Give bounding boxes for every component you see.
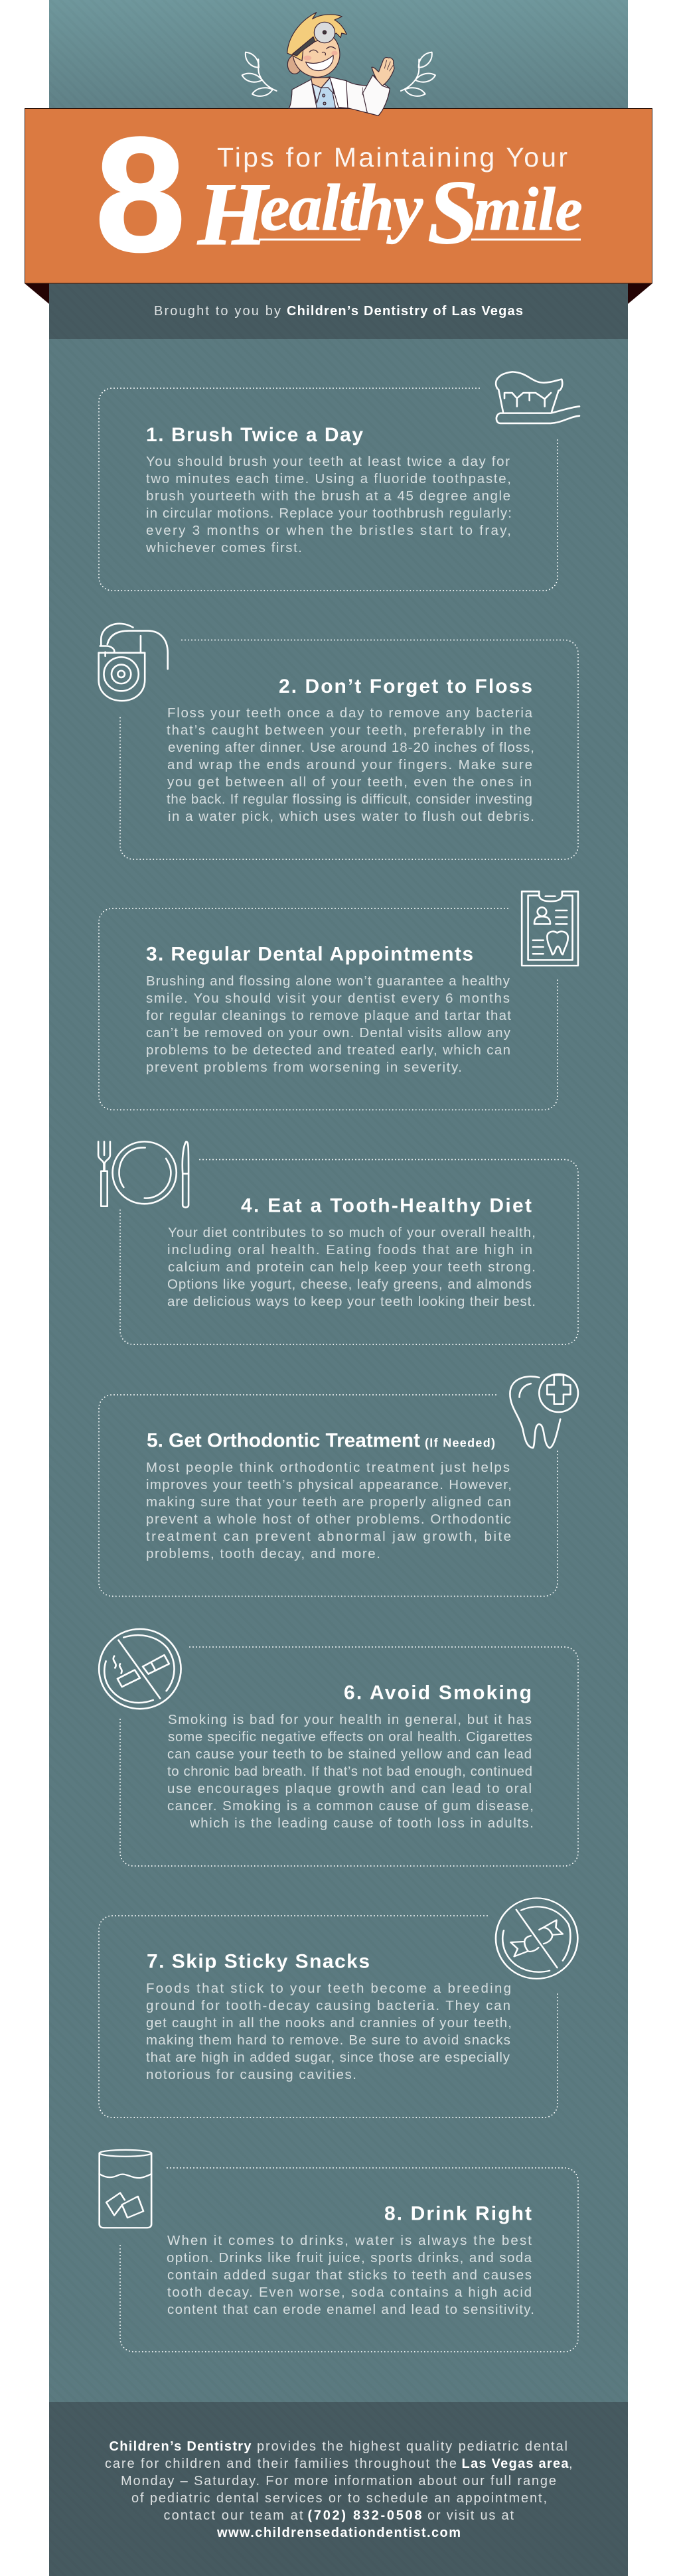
dark subtitle strip	[49, 283, 628, 339]
orange title banner	[25, 109, 652, 283]
tip 1 heading: 1. Brush Twice a Day	[146, 424, 363, 446]
title: number 8: 8	[95, 104, 186, 286]
tip 5 body text	[146, 1460, 512, 1561]
footer panel	[49, 2402, 628, 2576]
footer text: provides the highest quality pediatric dental	[257, 2439, 567, 2454]
footer text: of pediatric dental services or to schedule an appointment,	[131, 2491, 547, 2506]
icon: no candy	[496, 1898, 577, 1979]
panel: tip 3	[99, 891, 578, 1109]
tip 2 body text	[167, 705, 534, 824]
tip 6 body text: cancer. Smoking is a common cause of gum disease,	[167, 1798, 534, 1814]
title: healthy smile: mile	[474, 175, 583, 243]
tip 4 body text	[167, 1225, 536, 1309]
tip 6 body text: use encourages plaque growth and can lead to oral	[167, 1781, 532, 1796]
tip 1 body text: whichever comes first.	[145, 540, 302, 555]
tip 3 body text: problems to be detected and treated early, which can	[146, 1042, 510, 1058]
tip 7 body text: ground for tooth-decay causing bacteria. They can	[146, 1998, 510, 2013]
tip 1 body text	[145, 454, 512, 555]
panel: tip 2	[99, 624, 578, 859]
subtitle: brought to you by: Brought to you by	[154, 304, 281, 319]
tip 2 body text: the back. If regular flossing is difficult, consider investing	[167, 792, 532, 807]
tip 1 body text: You should brush your teeth at least twice a day for	[146, 454, 510, 469]
tip 8 body text	[167, 2233, 534, 2317]
tip 6 body text: some specific negative effects on oral health. Cigarettes	[168, 1729, 532, 1745]
tip 2 body text: you get between all of your teeth, even the ones in	[167, 774, 532, 790]
icon: plate and cutlery	[98, 1141, 188, 1208]
tip 3 body text: Brushing and flossing alone won’t guarantee a healthy	[146, 973, 510, 989]
subtitle: sponsor name: Children’s Dentistry of Las Vegas	[287, 304, 523, 319]
title: healthy smile	[197, 161, 583, 264]
tip 5 heading: 5. Get Orthodontic Treatment	[147, 1429, 420, 1452]
tip 1 body text: in circular motions. Replace your toothbrush regularly:	[146, 506, 512, 521]
tip 5 body text: Most people think orthodontic treatment just helps	[146, 1460, 510, 1475]
tip 6 body text	[167, 1712, 534, 1831]
tip 4 body text: are delicious ways to keep your teeth looking their best.	[167, 1294, 536, 1309]
footer text	[105, 2439, 573, 2540]
footer text: contact our team at	[163, 2508, 303, 2523]
panel: tip 4	[98, 1141, 578, 1344]
tip 3 body text	[146, 973, 511, 1075]
tip 8 body text: When it comes to drinks, water is always the best	[167, 2233, 532, 2248]
tip 7 body text: notorious for causing cavities.	[146, 2067, 356, 2082]
tip 3 heading: 3. Regular Dental Appointments	[146, 944, 473, 965]
panel: tip 8	[100, 2150, 578, 2352]
tip 7 body text: making them hard to remove. Be sure to avoid snacks	[146, 2033, 510, 2048]
title: tips for maintaining your: Tips for Maintaining Your	[217, 142, 567, 173]
tip 8 heading: 8. Drink Right	[384, 2203, 532, 2224]
tip 8 body text: contain added sugar that sticks to teeth and causes	[167, 2267, 532, 2283]
tip 5 heading: (If Needed)	[425, 1436, 495, 1449]
tip 7 body text: that are high in added sugar, since those are especially	[146, 2050, 510, 2065]
tip 5 body text: making sure that your teeth are properly aligned can	[146, 1494, 511, 1510]
tip 2 body text: in a water pick, which uses water to flush out debris.	[168, 809, 534, 824]
tip 4 body text: Your diet contributes to so much of your overall health,	[168, 1225, 536, 1240]
tip 7 heading: 7. Skip Sticky Snacks	[147, 1951, 370, 1972]
tip 5 body text: problems, tooth decay, and more.	[146, 1546, 380, 1561]
panel: tip 6	[99, 1629, 578, 1866]
tip 2 body text: evening after dinner. Use around 18-20 inches of floss,	[168, 740, 534, 755]
icon: no smoking	[99, 1629, 181, 1709]
icon: dental clipboard	[522, 891, 578, 966]
footer text: Children’s Dentistry	[109, 2439, 252, 2454]
tip 6 body text: Smoking is bad for your health in general, but it has	[168, 1712, 532, 1727]
footer text: ,	[569, 2457, 573, 2471]
tip 3 body text: smile. You should visit your dentist every 6 months	[146, 991, 510, 1006]
tip 5 body text: prevent a whole host of other problems. Orthodontic	[146, 1512, 511, 1527]
title: healthy smile: ealthy	[260, 171, 423, 244]
footer text: or visit us at	[427, 2508, 514, 2523]
footer text: care for children and their families throughout the	[105, 2457, 457, 2471]
tip 4 body text: calcium and protein can help keep your teeth strong.	[168, 1259, 536, 1275]
footer text: (702) 832-0508	[308, 2508, 422, 2523]
tip 6 body text: can cause your teeth to be stained yellow and can lead	[167, 1747, 532, 1762]
header illustration: laurels	[242, 52, 435, 96]
tip 4 heading: 4. Eat a Tooth-Healthy Diet	[241, 1194, 532, 1217]
panel: tip 5	[99, 1374, 578, 1597]
tip 2 heading: 2. Don’t Forget to Floss	[279, 676, 532, 697]
tip 7 body text: get caught in all the nooks and crannies of your teeth,	[146, 2015, 512, 2031]
icon: glass of water	[100, 2150, 151, 2228]
tip 8 body text: option. Drinks like fruit juice, sports drinks, and soda	[167, 2250, 532, 2265]
tip 4 body text: Options like yogurt, cheese, leafy greens, and almonds	[167, 1277, 532, 1292]
tip 5 body text: treatment can prevent abnormal jaw growth, bite	[146, 1529, 511, 1544]
icon: tooth with medical cross	[510, 1374, 578, 1448]
footer text: www.childrensedationdentist.com	[216, 2526, 461, 2540]
tip 6 body text: which is the leading cause of tooth loss in adults.	[189, 1816, 534, 1831]
tip 8 body text: tooth decay. Even worse, soda contains a high acid	[167, 2285, 532, 2300]
panel: tip 1	[99, 372, 579, 591]
tip 8 body text: content that can erode enamel and lead to sensitivity.	[167, 2302, 534, 2317]
tip 4 body text: including oral health. Eating foods that are high in	[167, 1242, 532, 1257]
tip 6 heading: 6. Avoid Smoking	[344, 1682, 532, 1704]
footer text: Monday – Saturday. For more information about our full range	[121, 2474, 556, 2488]
title: healthy smile: H	[197, 165, 270, 264]
tip 6 body text: to chronic bad breath. If that’s not bad enough, continued	[167, 1764, 532, 1779]
title: healthy smile: S	[427, 161, 479, 263]
tip 2 body text: Floss your teeth once a day to remove any bacteria	[167, 705, 533, 721]
tip 1 body text: brush yourteeth with the brush at a 45 degree angle	[146, 488, 510, 504]
tip 7 body text	[146, 1981, 512, 2082]
footer text: Las Vegas area	[462, 2457, 569, 2471]
tip 3 body text: prevent problems from worsening in severity.	[146, 1060, 462, 1075]
tip 3 body text: can’t be removed on your own. Dental visits allow any	[146, 1025, 511, 1040]
tip 1 body text: every 3 months or when the bristles start to fray,	[146, 523, 511, 538]
icon: dental floss	[99, 624, 168, 701]
icon: toothbrush in hand	[496, 372, 579, 423]
tip 5 body text: improves your teeth’s physical appearance. However,	[146, 1477, 512, 1492]
tip 3 body text: for regular cleanings to remove plaque and tartar that	[146, 1008, 511, 1023]
tip 2 body text: and wrap the ends around your fingers. Make sure	[167, 757, 532, 772]
panel: tip 7	[99, 1898, 577, 2117]
tip 1 body text: two minutes each time. Using a fluoride toothpaste,	[146, 471, 511, 486]
tip 7 body text: Foods that stick to your teeth become a breeding	[146, 1981, 511, 1996]
ribbon folds	[25, 283, 652, 304]
doctor character	[287, 13, 394, 115]
tip 2 body text: that’s caught between your teeth, preferably in the	[167, 723, 531, 738]
